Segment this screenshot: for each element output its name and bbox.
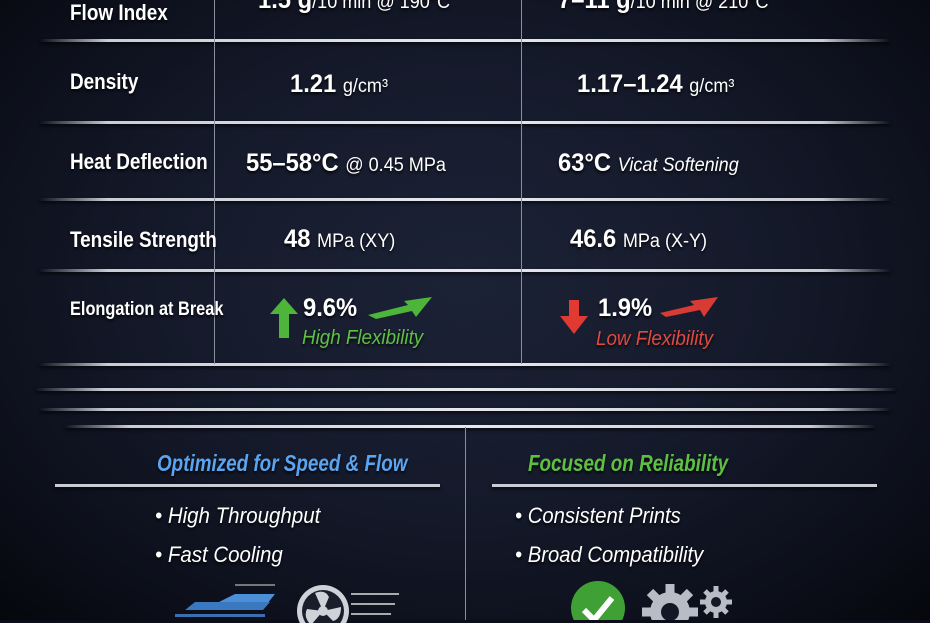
text: 46.6 MPa (X-Y) bbox=[570, 225, 707, 253]
panel: speed & flow bbox=[55, 450, 440, 623]
text: 1.17–1.24 g/cm³ bbox=[577, 70, 734, 98]
row: flow index: Flow Index bbox=[70, 0, 168, 25]
text: 55–58°C @ 0.45 MPa bbox=[246, 149, 446, 177]
text: 9.6% bbox=[303, 294, 357, 322]
panel: reliability bbox=[492, 450, 877, 620]
row: tensile strength: Tensile Strength bbox=[70, 227, 217, 252]
row: density: Density bbox=[70, 69, 138, 94]
bullets: • Consistent Prints bbox=[515, 503, 681, 528]
panel: speed & flow: • Fast Cooling bbox=[155, 542, 283, 567]
panel: reliability: • Broad Compatibility bbox=[515, 542, 703, 567]
icon: green swoosh bbox=[368, 297, 432, 319]
text: 48 MPa (XY) bbox=[284, 225, 395, 253]
icon: red down arrow bbox=[560, 300, 588, 334]
heading: Focused on Reliability bbox=[528, 450, 728, 476]
text: 1.21 g/cm³ bbox=[290, 70, 388, 98]
text: Low Flexibility bbox=[596, 328, 713, 350]
icon: check bbox=[571, 581, 625, 620]
icon: speed lines bbox=[175, 584, 275, 617]
text: 1.9% bbox=[598, 294, 652, 322]
bullets: • High Throughput bbox=[155, 503, 320, 528]
text: High Flexibility bbox=[302, 327, 423, 349]
icon: fan bbox=[297, 585, 399, 623]
text: 63°C Vicat Softening bbox=[558, 149, 739, 177]
icon: red swoosh bbox=[660, 297, 718, 317]
row: elongation: Elongation at Break bbox=[70, 299, 223, 320]
icon: green up arrow bbox=[270, 298, 298, 338]
icon: gears bbox=[642, 584, 732, 620]
row: heat deflection: Heat Deflection bbox=[70, 149, 208, 174]
heading: Optimized for Speed & Flow bbox=[157, 450, 407, 476]
